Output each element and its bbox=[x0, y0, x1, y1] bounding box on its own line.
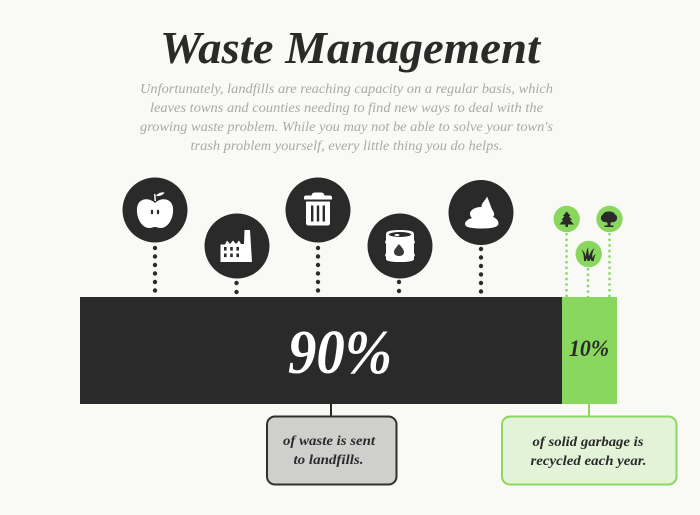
dotted connectors: landfill icons bbox=[153, 246, 483, 294]
callout: recycled: recycled each year. bbox=[530, 454, 646, 469]
title: Waste Management bbox=[160, 22, 541, 73]
connector: recycled bbox=[588, 404, 590, 417]
intro text: leaves towns and counties needing to find new ways to deal with the bbox=[150, 101, 543, 116]
bar: 90 percent landfill bbox=[80, 297, 562, 404]
callout: recycled bbox=[502, 416, 676, 484]
callout: landfills: to landfills. bbox=[294, 453, 364, 468]
icon: poop pile bbox=[448, 180, 514, 245]
callout: landfills: of waste is sent bbox=[283, 434, 376, 449]
icon: trash can bbox=[286, 178, 350, 242]
bar: 90 percent landfill: 90% bbox=[288, 319, 392, 387]
intro text: growing waste problem. While you may not be able to solve your town's bbox=[140, 120, 554, 135]
intro text bbox=[140, 82, 554, 154]
bar: 10 percent recycled bbox=[562, 297, 617, 404]
callout: recycled: of solid garbage is bbox=[532, 435, 644, 450]
icon: pine tree bbox=[554, 206, 580, 232]
intro text: trash problem yourself, every little thing you do helps. bbox=[190, 139, 502, 154]
callout: landfills bbox=[267, 416, 396, 484]
connector: landfills bbox=[330, 404, 332, 417]
intro text: Unfortunately, landfills are reaching capacity on a regular basis, which bbox=[140, 82, 553, 97]
icon: factory bbox=[204, 214, 270, 278]
icon: apple bbox=[122, 178, 188, 242]
icon: round tree bbox=[596, 206, 623, 232]
icon: oil barrel bbox=[368, 214, 432, 278]
dotted connectors: recycled icons bbox=[566, 233, 610, 297]
bar: 10 percent recycled: 10% bbox=[569, 336, 609, 361]
icon: grass bbox=[576, 241, 602, 267]
